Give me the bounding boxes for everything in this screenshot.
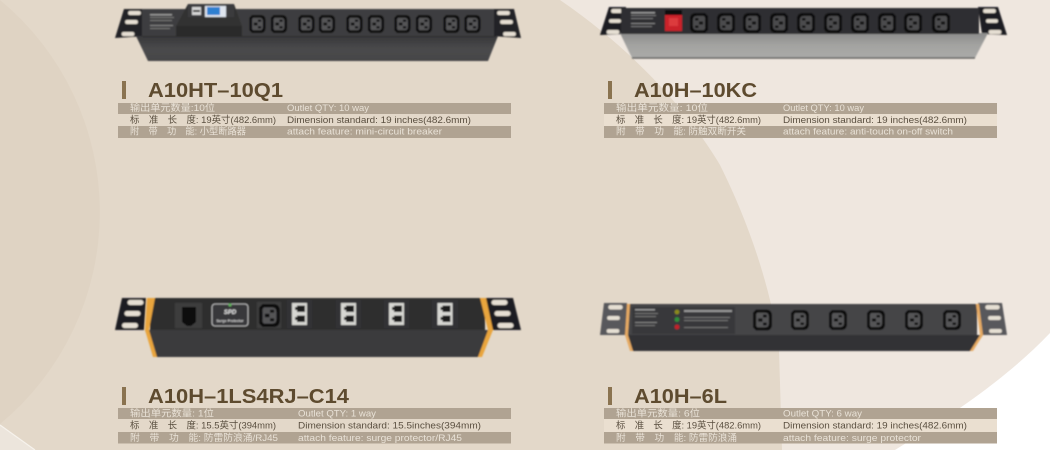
spec table: Outlet QTY: 10 way — [287, 103, 369, 114]
marker — [122, 387, 126, 405]
heading: A10H–6L — [634, 386, 727, 408]
spec table: 附 带 功 能: 小型断路器 — [130, 126, 246, 138]
spec table: 标 准 长 度: 19英寸(482.6mm) — [130, 114, 276, 126]
spec table: 标 准 长 度: 15.5英寸(394mm) — [130, 420, 276, 432]
spec table: Dimension standard: 19 inches(482.6mm) — [783, 115, 967, 126]
spec table: 输出单元数量: 1位 — [130, 408, 215, 420]
spec table: Dimension standard: 19 inches(482.6mm) — [783, 420, 967, 432]
product: A10H-1LS4RJ-C14 power strip: Surge Protector — [216, 319, 244, 323]
panel: A10H-10KC — [600, 7, 1007, 138]
spec table: Outlet QTY: 1 way — [298, 408, 376, 420]
spec table — [604, 102, 997, 138]
spec table — [118, 408, 511, 444]
heading: A10H–1LS4RJ–C14 — [148, 386, 350, 408]
marker — [608, 81, 612, 99]
spec table: attach feature: surge protector/RJ45 — [298, 433, 462, 444]
spec table: attach feature: mini-circuit breaker — [287, 127, 442, 138]
spec table: 输出单元数量: 10位 — [616, 102, 709, 114]
spec table: 输出单元数量: 6位 — [616, 408, 701, 420]
spec table: 附 带 功 能: 防雷防浪涌/RJ45 — [130, 432, 278, 444]
panel: A10H-1LS4RJ-C14 — [115, 298, 521, 444]
spec table: Dimension standard: 19 inches(482.6mm) — [287, 115, 471, 126]
panel: A10H-6L — [600, 303, 1007, 444]
spec table: Outlet QTY: 6 way — [783, 408, 862, 420]
product: A10H-1LS4RJ-C14 power strip — [115, 298, 521, 357]
product: A10H-1LS4RJ-C14 power strip: SPD — [224, 310, 237, 316]
product: A10H-10KC power strip — [600, 7, 1007, 58]
spec table: attach feature: anti-touch on-off switch — [783, 127, 953, 138]
spec table: 标 准 长 度: 19英寸(482.6mm) — [616, 114, 761, 126]
spec table: Dimension standard: 15.5inches(394mm) — [298, 420, 481, 432]
spec table — [118, 102, 511, 138]
product: A10HT-10Q1 power strip — [115, 4, 521, 61]
heading: A10H–10KC — [634, 80, 757, 102]
spec table: attach feature: surge protector — [783, 433, 921, 444]
spec table: 标 准 长 度: 19英寸(482.6mm) — [616, 420, 761, 432]
spec table: 附 带 功 能: 防触双断开关 — [616, 126, 747, 138]
product: A10H-6L power strip — [600, 303, 1007, 351]
marker — [608, 387, 612, 405]
spec table — [604, 408, 997, 444]
heading: A10HT–10Q1 — [148, 80, 283, 102]
spec table: 附 带 功 能: 防雷防浪涌 — [616, 432, 737, 444]
marker — [122, 81, 126, 99]
spec table: Outlet QTY: 10 way — [783, 103, 864, 114]
panel: A10HT-10Q1 — [115, 4, 521, 138]
spec table: 输出单元数量:10位 — [130, 102, 216, 114]
